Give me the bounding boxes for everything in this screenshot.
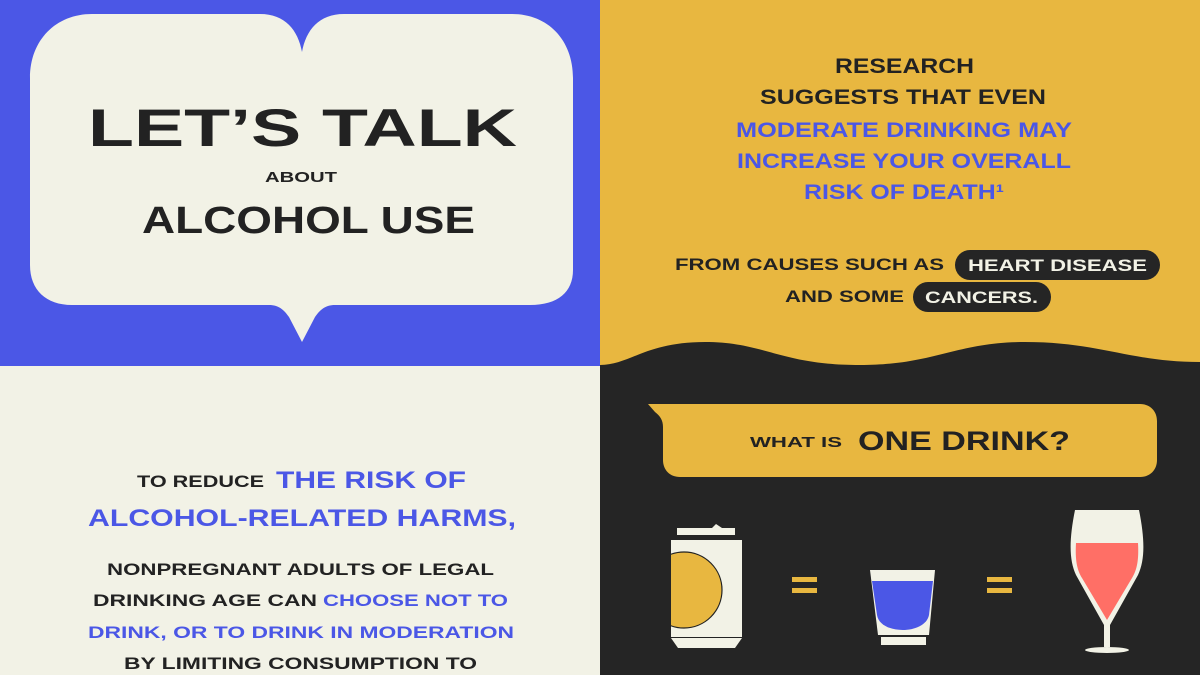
text block: moderation guidance	[88, 560, 514, 673]
pill: cancers	[913, 282, 1051, 312]
icon: equals sign 1	[792, 577, 817, 593]
panel: blue title background	[0, 0, 600, 366]
text block: causes: CANCERS.	[925, 288, 1038, 307]
callout: what is one drink	[648, 404, 1157, 477]
text block: research suggests: RISK OF DEATH¹	[804, 181, 1004, 204]
text block: research suggests	[736, 55, 1072, 204]
text block: research suggests: MODERATE DRINKING MAY	[736, 119, 1072, 142]
text: about: ABOUT	[265, 169, 337, 186]
panel: yellow top-right with wave	[600, 0, 1200, 365]
text block: research suggests: INCREASE YOUR OVERALL	[737, 150, 1071, 173]
text block: reduce the risk	[88, 467, 516, 532]
panel: dark bottom-right	[600, 330, 1200, 675]
text block: causes	[675, 250, 1160, 312]
text block: research suggests: SUGGESTS THAT EVEN	[760, 86, 1046, 109]
icon: shot glass	[870, 570, 935, 645]
text block: moderation guidance: DRINK, OR TO DRINK IN MODERATION	[88, 623, 514, 642]
text block: reduce the risk: ALCOHOL-RELATED HARMS,	[88, 505, 516, 532]
callout: what is one drink: WHAT IS	[750, 434, 842, 451]
title: ALCOHOL USE: ALCOHOL USE	[142, 200, 475, 242]
callout: what is one drink: ONE DRINK?	[858, 426, 1070, 456]
text block: causes: AND SOME	[785, 287, 904, 306]
icon: wine glass	[1071, 510, 1143, 653]
text block: moderation guidance: BY LIMITING CONSUMPTION TO	[124, 654, 477, 673]
panel: cream bottom-left	[0, 366, 600, 675]
icon: equals sign 2	[987, 577, 1012, 593]
text block: causes: HEART DISEASE	[968, 256, 1147, 275]
text block: causes: FROM CAUSES SUCH AS	[675, 255, 944, 274]
icon: beer can	[671, 524, 742, 648]
text block: reduce the risk: THE RISK OF	[276, 467, 466, 494]
text block: reduce the risk: TO REDUCE	[137, 472, 264, 491]
text block: moderation guidance: CHOOSE NOT TO	[323, 591, 508, 610]
title: LET'S TALK: LET’S TALK	[88, 99, 517, 158]
text block: moderation guidance: DRINKING AGE CAN	[93, 591, 317, 610]
text block: moderation guidance: NONPREGNANT ADULTS OF LEGAL	[107, 560, 494, 579]
pill: heart disease	[955, 250, 1160, 280]
speech bubble: title	[30, 14, 573, 342]
text block: research suggests: RESEARCH	[835, 55, 974, 78]
